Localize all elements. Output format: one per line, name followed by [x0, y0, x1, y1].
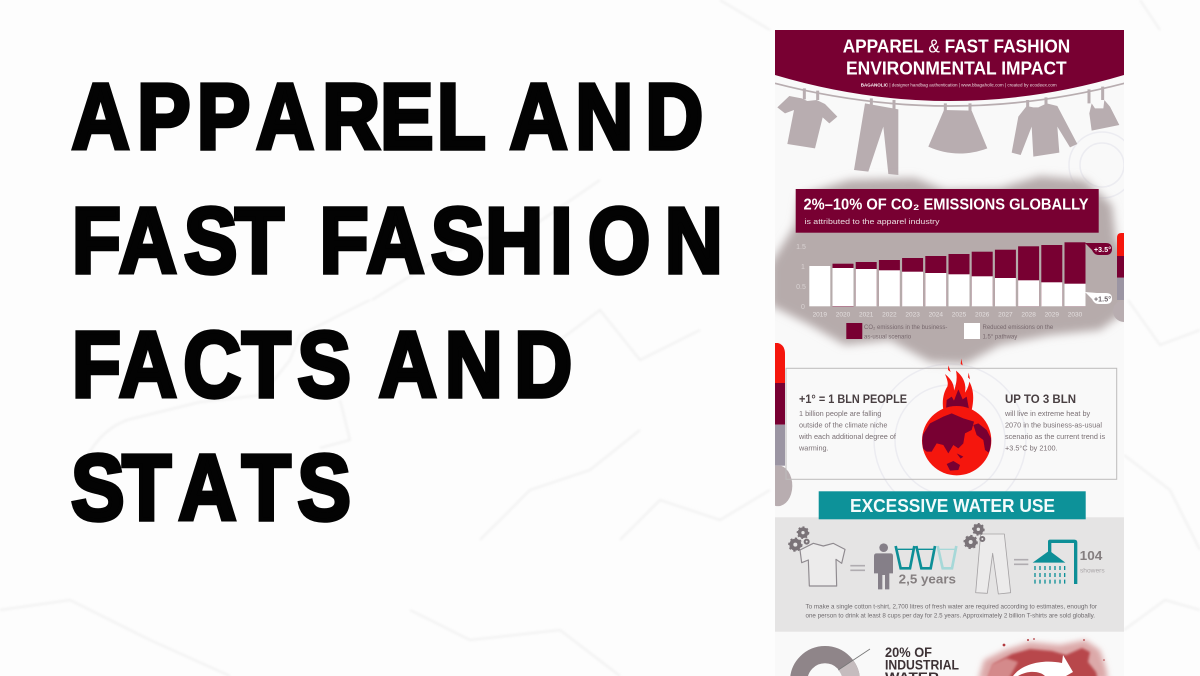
header title: ENVIRONMENTAL IMPACT	[846, 57, 1067, 78]
text: up to 3 billion: scenario as the current trend is	[1005, 432, 1106, 441]
callout: +1.5 degrees	[1085, 292, 1112, 304]
x axis labels: 2025	[952, 312, 967, 318]
text: up to 3 billion: UP TO 3 BLN	[1005, 394, 1076, 406]
chart legend: as-usual scenario	[864, 334, 912, 340]
bar chart	[796, 242, 1086, 318]
header title: APPAREL & FAST FASHION	[843, 35, 1070, 56]
trousers	[854, 103, 898, 175]
header banner	[775, 30, 1124, 101]
watermark stamps	[874, 132, 1124, 491]
x axis labels: 2027	[998, 312, 1013, 318]
text: up to 3 billion: +3.5°C by 2100.	[1005, 444, 1058, 452]
water heading banner	[819, 491, 1086, 519]
text: 20% of industrial water	[885, 645, 959, 676]
header title	[843, 40, 1070, 74]
text: 104 showers	[1080, 548, 1105, 574]
maroon bars	[832, 242, 1086, 307]
icon: burning globe	[921, 359, 993, 475]
icon: gears left	[789, 527, 809, 551]
smoke cloud	[770, 176, 1128, 364]
chart legend: CO₂ emissions in the business-	[864, 325, 947, 331]
globe	[922, 406, 991, 475]
icon: person	[874, 543, 893, 589]
icon: shower	[1033, 540, 1077, 584]
emissions heading box: 2%–10% OF CO₂ EMISSIONS GLOBALLY	[804, 196, 1089, 214]
y axis labels: 0.5	[796, 284, 806, 291]
text: 20% of industrial water: 20% OF	[885, 645, 932, 660]
icon: gears right	[964, 524, 984, 548]
main title: FAST FASHION	[72, 189, 723, 293]
icon: jeans outline	[976, 534, 1011, 594]
chart legend: Reduced emissions on the	[982, 325, 1054, 331]
white bars	[809, 266, 1086, 306]
y axis labels: 1.5	[796, 244, 806, 251]
x axis labels: 2029	[1045, 312, 1059, 318]
text: 1 billion people: warming.	[798, 444, 829, 452]
x axis labels: 2022	[882, 312, 897, 318]
sweater	[1012, 103, 1077, 157]
water description	[806, 604, 1098, 620]
climate panel outline	[786, 368, 1117, 479]
text: 1 billion people: outside of the climate niche	[799, 420, 887, 430]
x axis labels: 2030	[1068, 312, 1083, 318]
main title: APPAREL AND	[72, 65, 703, 169]
donut chart	[799, 649, 870, 676]
text: 104 showers: 104	[1080, 548, 1103, 563]
x axis labels	[813, 312, 1082, 316]
main title	[71, 65, 723, 540]
chart legend: 1.5° pathway	[982, 334, 1017, 340]
t-shirt	[777, 96, 837, 148]
icon: polluted water splash with arrow	[978, 638, 1108, 676]
main title: FACTS AND	[72, 313, 572, 417]
text: 1 billion people: 1 billion people are falling	[799, 409, 881, 418]
water heading banner: EXCESSIVE WATER USE	[850, 496, 1055, 516]
equals sign 2	[1014, 560, 1028, 564]
water panel background	[775, 517, 1124, 632]
x axis labels: 2028	[1021, 312, 1036, 318]
chart legend	[846, 323, 1054, 340]
text: up to 3 billion: 2070 in the business-as-usual	[1005, 420, 1102, 430]
skirt	[928, 110, 987, 154]
text: up to 3 billion: will live in extreme heat by	[1004, 409, 1091, 418]
y axis labels: 0	[801, 304, 805, 311]
callout: +1.5 degrees: +1.5°	[1094, 296, 1111, 304]
text: 1 billion people	[798, 394, 907, 452]
x axis labels: 2024	[929, 312, 943, 318]
header credits: BAGANOLIC | designer handbag authentication | www.bbagaholic.com | created by ecodeex.com	[861, 82, 1057, 88]
text: 1 billion people: with each additional degree of	[798, 432, 897, 441]
text: 2,5 years: 2,5 years	[899, 572, 956, 586]
x axis labels: 2023	[905, 312, 920, 318]
main title: STATS	[71, 436, 351, 540]
emissions heading box	[796, 189, 1099, 233]
x axis labels: 2021	[859, 312, 874, 318]
callout: +3.5 degrees	[1085, 243, 1112, 255]
right thermometer tab	[1113, 233, 1124, 322]
text: 104 showers: showers	[1080, 568, 1105, 574]
tank top	[1089, 100, 1119, 131]
text: 1 billion people: +1° = 1 BLN PEOPLE	[799, 394, 907, 406]
water equations	[789, 524, 1105, 594]
icon: t-shirt outline	[800, 543, 845, 586]
x axis labels: 2019	[813, 312, 827, 318]
infographic preview panel	[770, 30, 1135, 676]
y axis labels	[796, 244, 806, 309]
pegs	[804, 87, 1103, 112]
y axis labels: 1	[801, 264, 805, 271]
text: 20% of industrial water: INDUSTRIAL	[885, 658, 959, 672]
water description: To make a single cotton t-shirt, 2,700 litres of fresh water are required according to estimates, enough for	[806, 604, 1098, 610]
text: up to 3 billion	[1004, 394, 1106, 452]
continents	[921, 413, 993, 471]
clothesline with garments	[775, 83, 1124, 175]
icons: water glasses	[896, 546, 956, 568]
x axis labels: 2020	[836, 312, 851, 318]
x axis labels: 2026	[975, 312, 990, 318]
flames	[943, 371, 973, 410]
equals sign 1	[850, 566, 865, 570]
emissions heading box: is attributed to the apparel industry	[804, 217, 940, 226]
left thermometer tab	[775, 343, 792, 506]
callout: +3.5 degrees: +3.5°	[1094, 246, 1111, 254]
water description: one person to drink at least 8 cups per day for 2.5 years. Approximately 2 billion T-shirts are sold globally.	[806, 612, 1095, 620]
